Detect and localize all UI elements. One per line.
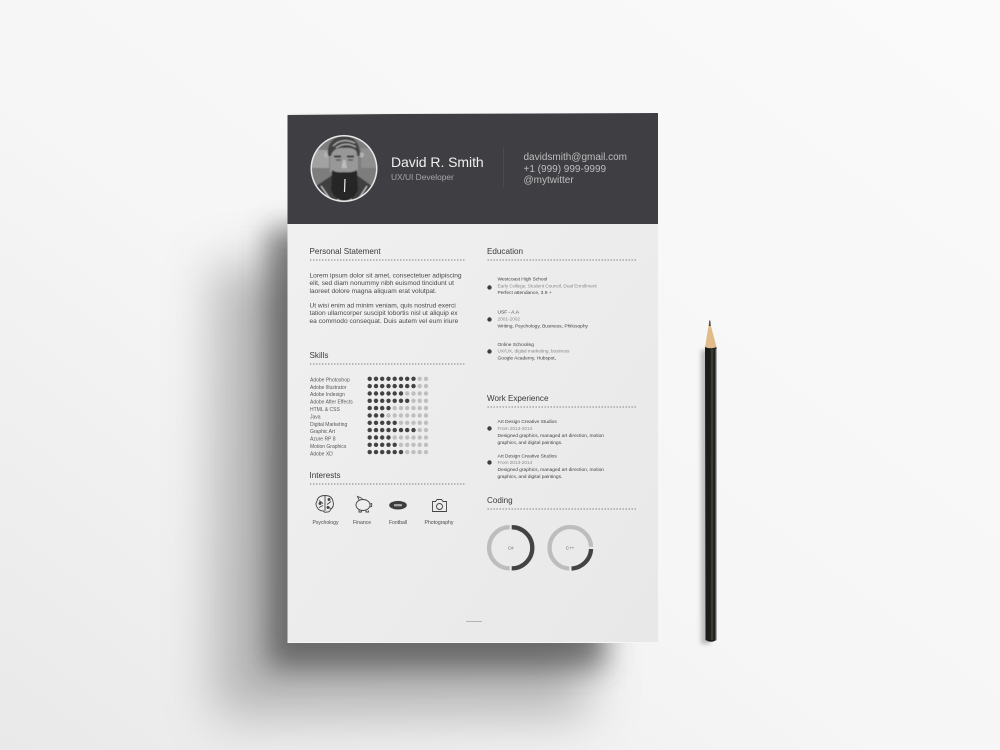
education entry 3: Google Academy, Hubspot, [498, 356, 556, 362]
panel: education [487, 247, 637, 362]
skill names [310, 378, 353, 457]
statement text: Lorem ipsum dolor sit amet, consectetuer adipiscing [310, 272, 462, 280]
skill names: Adobe XD [310, 451, 333, 457]
panel: skills: Skills [310, 351, 328, 360]
education entry 1: Westcoast High School [498, 276, 547, 282]
contact details: @mytwitter [524, 175, 574, 186]
icon: photography camera [432, 500, 446, 512]
panel: personal statement: Personal Statement [310, 247, 381, 256]
icon: psychology brain [316, 496, 333, 512]
work entry 1: Designed graphics, managed art direction, motion [498, 433, 604, 439]
education entry 2: 2001-2002 [498, 316, 520, 322]
education entry 2 [487, 310, 589, 330]
portrait photo [310, 135, 378, 204]
label: football: Football [389, 520, 407, 526]
contact details: +1 (999) 999-9999 [524, 164, 607, 175]
education entry 3 [487, 342, 570, 362]
paper shadow [215, 228, 605, 715]
skill names: Adobe After Effects [310, 400, 353, 406]
statement text: laoreet dolore magna aliquam erat volutpat. [310, 288, 437, 295]
education entry 2: Writing, Psychology, Business, Philosophy [498, 324, 589, 330]
panel: work experience [487, 394, 637, 480]
resume sheet [288, 113, 658, 643]
label: finance: Finance [353, 520, 371, 526]
education entry 1: Early College, Student Council, Dual Enrollment [498, 284, 597, 290]
panel: coding: Coding [487, 496, 513, 505]
skill names: Azure RP 8 [310, 436, 336, 442]
skill names: HTML & CSS [310, 407, 340, 413]
work entry 2 [487, 454, 604, 480]
donut chart: C++: C++ [566, 546, 575, 550]
work entry 1: graphics, and digital paintings. [498, 440, 562, 446]
statement text [310, 272, 462, 325]
icon: football [389, 501, 407, 510]
label: psychology: Psychology [312, 520, 339, 526]
statement text: Ut wisi enim ad minim veniam, quis nostrud exerci [310, 302, 456, 310]
work entry 2: Art Design Creative Studios [498, 454, 557, 460]
pencil [701, 320, 716, 644]
skill rating dots [368, 377, 428, 454]
panel: interests [310, 471, 465, 526]
statement text: tation ullamcorper suscipit lobortis nisl ut aliquip ex [310, 310, 458, 317]
education entry 2: USF - A.A [498, 310, 520, 316]
education entry 1 [487, 276, 597, 296]
work entry 1: From 2013-2014 [498, 426, 533, 432]
name and job title: David R. Smith [391, 154, 484, 170]
name and job title: UX/UI Developer [391, 172, 454, 182]
statement text: elit, sed diam nonummy nibh euismod tincidunt ut [310, 280, 454, 287]
skill names: Motion Graphics [310, 444, 347, 450]
name and job title [391, 154, 484, 182]
contact details: davidsmith@gmail.com [524, 152, 627, 163]
statement text: ea commodo consequat. Duis autem vel eum iriure [310, 318, 459, 325]
education entry 3: UX/UX, digital marketing, business [498, 348, 570, 354]
icon: finance piggy bank [356, 496, 372, 512]
work entry 2: graphics, and digital paintings. [498, 474, 562, 480]
donut chart: C# [489, 527, 532, 568]
skill names: Graphic Art [310, 429, 336, 435]
work entry 2: Designed graphics, managed art direction, motion [498, 467, 604, 473]
skill names: Java [310, 414, 321, 420]
skill names: Adobe Illustrator [310, 385, 347, 391]
panel: coding [487, 496, 637, 569]
footer mark [466, 620, 482, 623]
education entry 3: Online Schooling [498, 342, 534, 348]
panel: personal statement [310, 247, 465, 325]
header band [288, 113, 658, 224]
header divider [503, 147, 504, 187]
panel: skills [310, 351, 465, 457]
work entry 1 [487, 419, 604, 446]
contact details [524, 152, 627, 186]
panel: work experience: Work Experience [487, 394, 549, 403]
donut chart: C#: C# [508, 546, 514, 550]
donut chart: C++ [550, 527, 591, 569]
panel: education: Education [487, 247, 523, 256]
label: photography: Photography [425, 520, 454, 526]
skill names: Adobe Indesign [310, 392, 345, 398]
education entry 1: Perfect attendance, 3.9 + [498, 290, 552, 296]
panel: interests: Interests [310, 471, 341, 480]
work entry 1: Art Design Creative Studios [498, 419, 557, 425]
work entry 2: From 2013-2014 [498, 460, 533, 466]
skill names: Adobe Photoshop [310, 378, 350, 384]
skill names: Digital Marketing [310, 422, 347, 428]
